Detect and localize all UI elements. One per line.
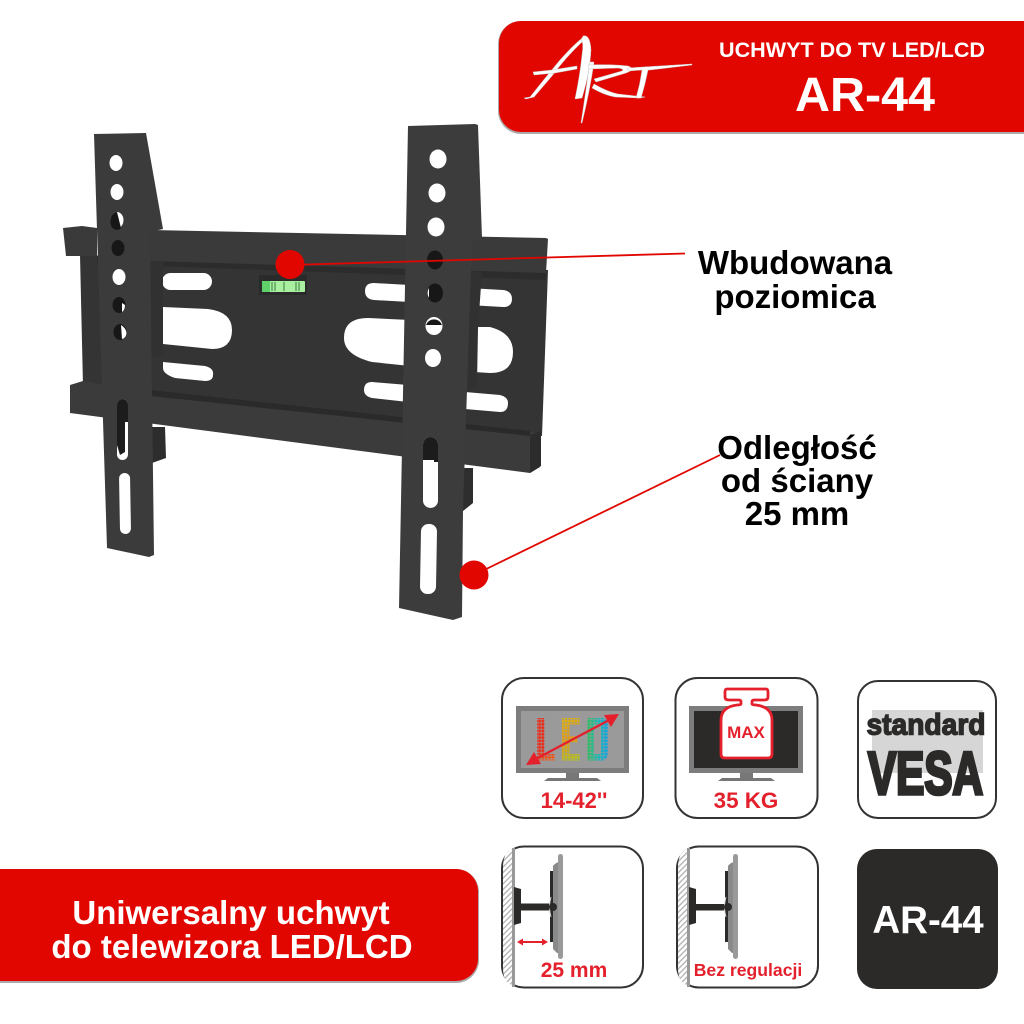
icon: TV with weight: MAX <box>727 723 766 742</box>
callout text: level: Wbudowana <box>698 244 893 281</box>
model name: AR-44 <box>795 69 935 122</box>
upper rail <box>150 230 548 273</box>
card: model AR-44: AR-44 <box>872 899 984 942</box>
arrow: distance <box>517 938 548 946</box>
icon: wall mount side view <box>678 848 738 987</box>
callout text: distance: od ściany <box>721 462 874 499</box>
card: VESA <box>858 681 996 818</box>
plate slots <box>162 273 513 412</box>
right bracket <box>399 124 482 620</box>
banner text: do telewizora LED/LCD <box>51 928 413 965</box>
label: 25 mm <box>541 959 607 982</box>
logo: ART <box>524 36 692 123</box>
callout text: level: poziomica <box>714 278 876 315</box>
card: max weight <box>676 678 818 818</box>
callout line: level <box>276 250 685 279</box>
back plate <box>80 255 548 436</box>
header text: UCHWYT DO TV LED/LCD <box>719 38 985 62</box>
left bracket <box>94 133 166 557</box>
icon: wall mount side view <box>503 848 563 987</box>
label: 35 KG <box>714 788 778 813</box>
header banner <box>498 21 1024 134</box>
icon: TV with weight <box>689 689 803 781</box>
bracket flanges behind <box>148 261 163 385</box>
arrow: diagonal <box>526 714 619 765</box>
lower rail <box>70 381 540 473</box>
label: 14-42'' <box>541 788 607 813</box>
card: distance 25 mm <box>502 846 643 988</box>
card: no adjustment <box>677 846 818 988</box>
callout line: distance <box>460 455 720 590</box>
callout text: distance: Odległość <box>717 429 877 466</box>
callout text: distance: 25 mm <box>745 495 849 532</box>
bottom banner <box>0 869 479 983</box>
text: standard: standard <box>866 708 986 742</box>
label: Bez regulacji <box>694 960 802 980</box>
wall bracket product illustration <box>63 124 548 620</box>
banner text: Uniwersalny uchwyt <box>72 894 390 931</box>
spirit level <box>259 275 307 295</box>
card: model AR-44 <box>857 849 998 989</box>
card: screen size <box>502 678 643 818</box>
icon: LED TV <box>516 706 629 781</box>
